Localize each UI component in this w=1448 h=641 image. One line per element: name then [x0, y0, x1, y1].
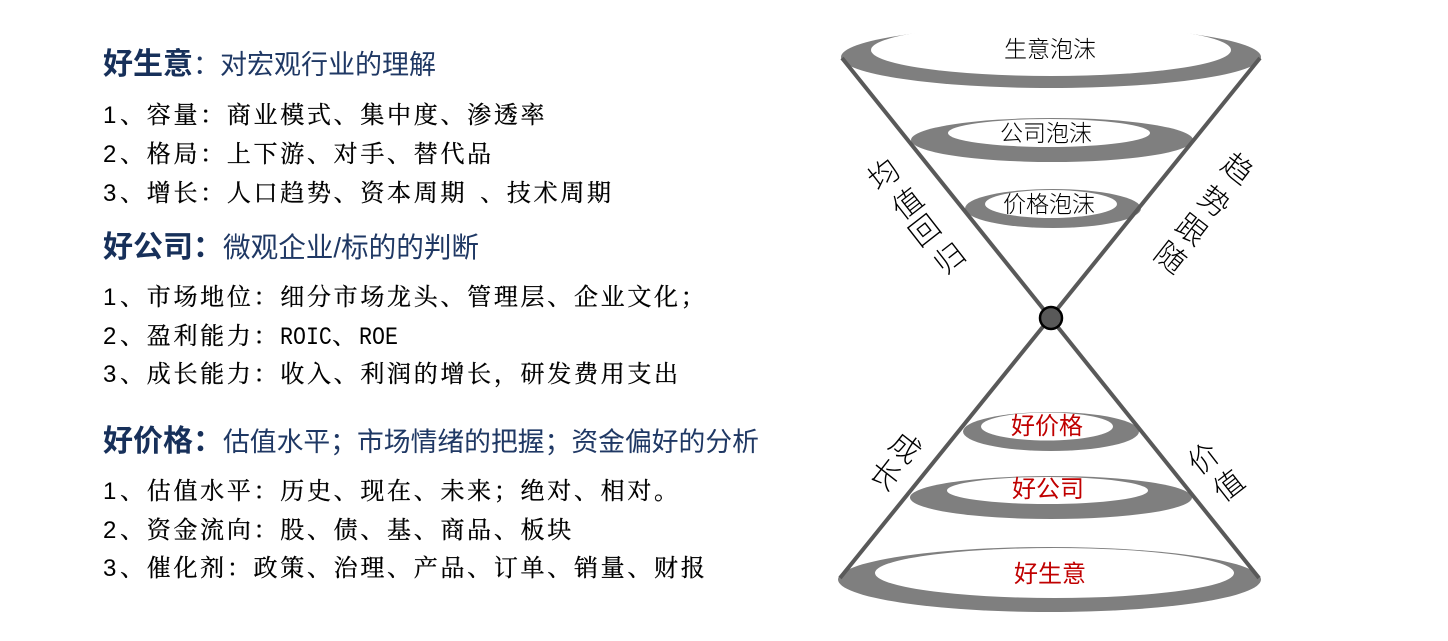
ring: price bubble — [965, 189, 1141, 228]
hourglass crossing lines — [840, 58, 1260, 578]
label: trend following: 趋 — [1215, 147, 1259, 192]
list item 2: ROE — [359, 323, 398, 352]
list item 1: 1、市场地位：细分市场龙头、管理层、企业文化； — [103, 284, 707, 311]
panel: good price text — [103, 425, 759, 582]
label: growth: 成 — [883, 426, 927, 471]
list item 2: 2、格局：上下游、对手、替代品 — [103, 141, 494, 168]
panel: good company text — [103, 231, 707, 388]
ring: good business — [838, 547, 1261, 612]
label: growth — [863, 426, 927, 498]
label: trend following: 随 — [1148, 236, 1192, 281]
center node — [1040, 307, 1062, 329]
label: value: 值 — [1207, 464, 1251, 509]
label: business bubble: 生意泡沫 — [1004, 36, 1096, 62]
label: good business: 好生意 — [1014, 561, 1086, 588]
label: good company: 好公司 — [1012, 476, 1084, 503]
heading: good business: 好生意：对宏观行业的理解 — [103, 48, 436, 81]
heading: good company: 好公司：微观企业/标的的判断 — [103, 231, 479, 264]
label: price bubble: 价格泡沫 — [1003, 191, 1095, 217]
label: company bubble: 公司泡沫 — [1000, 120, 1092, 146]
label: trend following: 跟 — [1169, 208, 1213, 253]
label: good price: 好价格 — [1011, 413, 1083, 440]
list item 3: 3、催化剂：政策、治理、产品、订单、销量、财报 — [103, 555, 707, 582]
label: mean reversion: 回 — [903, 209, 947, 254]
list item 2: 2、资金流向：股、债、基、商品、板块 — [103, 517, 574, 544]
panel: good business text — [103, 48, 614, 207]
list item 1: 1、容量：商业模式、集中度、渗透率 — [103, 102, 547, 129]
list item 1: 1、估值水平：历史、现在、未来；绝对、相对。 — [103, 478, 681, 505]
list item 3: 3、成长能力：收入、利润的增长，研发费用支出 — [103, 361, 681, 388]
heading: good price: 好价格：估值水平；市场情绪的把握；资金偏好的分析 — [103, 425, 759, 458]
list item 2: ROIC — [280, 323, 332, 352]
list item 3: 3、增长：人口趋势、资本周期 、技术周期 — [103, 180, 614, 207]
label: growth: 长 — [863, 453, 907, 498]
ring: business bubble — [841, 24, 1261, 88]
label: mean reversion: 归 — [928, 237, 972, 282]
label: mean reversion: 均 — [862, 153, 906, 198]
label: trend following — [1148, 147, 1259, 281]
label: mean reversion: 值 — [886, 182, 930, 227]
list item 2: 2、盈利能力： 、 — [103, 323, 359, 350]
ring: good company — [910, 476, 1192, 519]
ring: good price — [963, 412, 1139, 451]
ring: company bubble — [911, 118, 1193, 162]
label: value — [1182, 437, 1251, 509]
label: trend following: 势 — [1192, 180, 1236, 225]
label: value: 价 — [1182, 437, 1226, 482]
label: mean reversion — [862, 153, 972, 282]
